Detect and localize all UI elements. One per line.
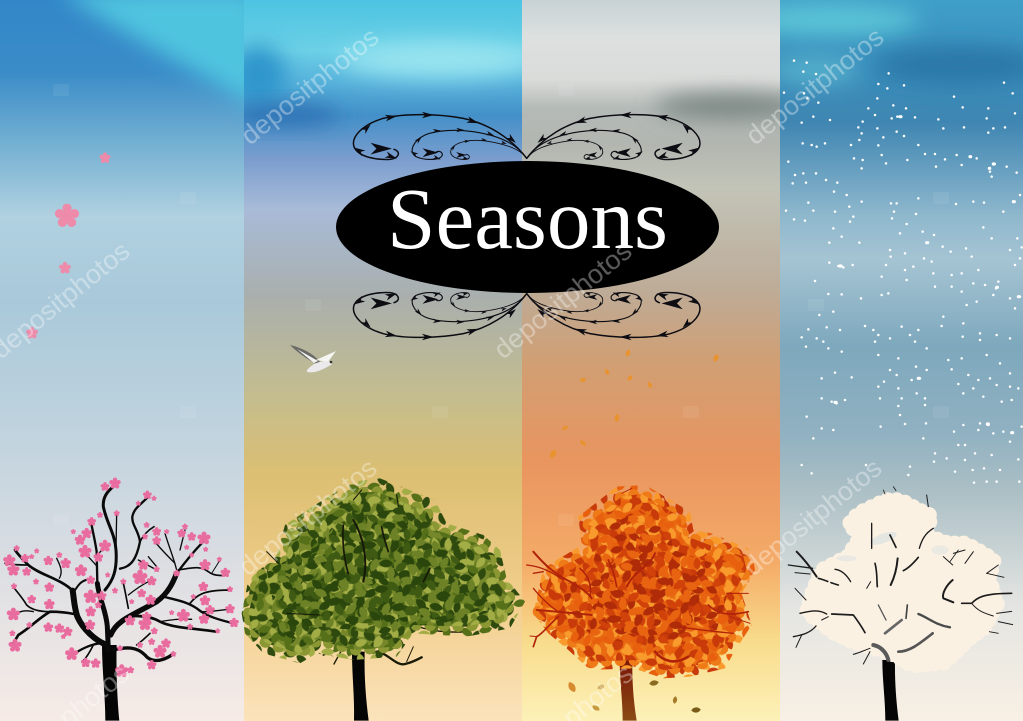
- panel: winter sky: [780, 0, 1023, 721]
- watermarks: depositphotos: [235, 22, 384, 151]
- canopy: [242, 478, 525, 663]
- trunk: [352, 652, 369, 721]
- watermarks: depositphotos: [488, 236, 637, 365]
- title: Seasons: Seasons: [387, 170, 668, 267]
- watermarks: depositphotos: [738, 453, 887, 582]
- winter tree: [788, 487, 1013, 721]
- spring tree: [3, 477, 239, 721]
- trunk: [620, 660, 637, 721]
- watermarks: depositphotos: [233, 453, 382, 582]
- summer tree: [242, 478, 525, 721]
- falling blossoms: [26, 152, 111, 338]
- autumn tree: [527, 485, 755, 721]
- decorative flourish: top right: [527, 112, 702, 162]
- snow gaps: [837, 529, 949, 561]
- panel: autumn sky: [522, 0, 805, 721]
- watermark camera icons: [53, 84, 949, 526]
- branches: [527, 488, 750, 661]
- branch fragments: [788, 487, 1013, 664]
- blossoms: [3, 477, 239, 677]
- panel: spring sky: [0, 0, 260, 721]
- lower branches: [267, 625, 467, 664]
- watermarks: depositphotos: [740, 22, 889, 151]
- trunk: [882, 660, 899, 721]
- canopy: [533, 485, 755, 678]
- snow canopy: [807, 500, 997, 666]
- bird: [290, 345, 336, 372]
- decorative flourish: bottom right: [527, 290, 702, 340]
- decorative flourish: bottom left: [352, 290, 527, 340]
- snowfall: [784, 61, 1022, 483]
- decorative flourish: top left: [352, 112, 527, 162]
- falling autumn leaves: [548, 349, 720, 713]
- trunk: [102, 645, 119, 721]
- branches: [5, 487, 233, 661]
- panel: summer sky: [244, 0, 522, 721]
- inner branches: [267, 490, 430, 615]
- title badge: black oval: [336, 161, 719, 293]
